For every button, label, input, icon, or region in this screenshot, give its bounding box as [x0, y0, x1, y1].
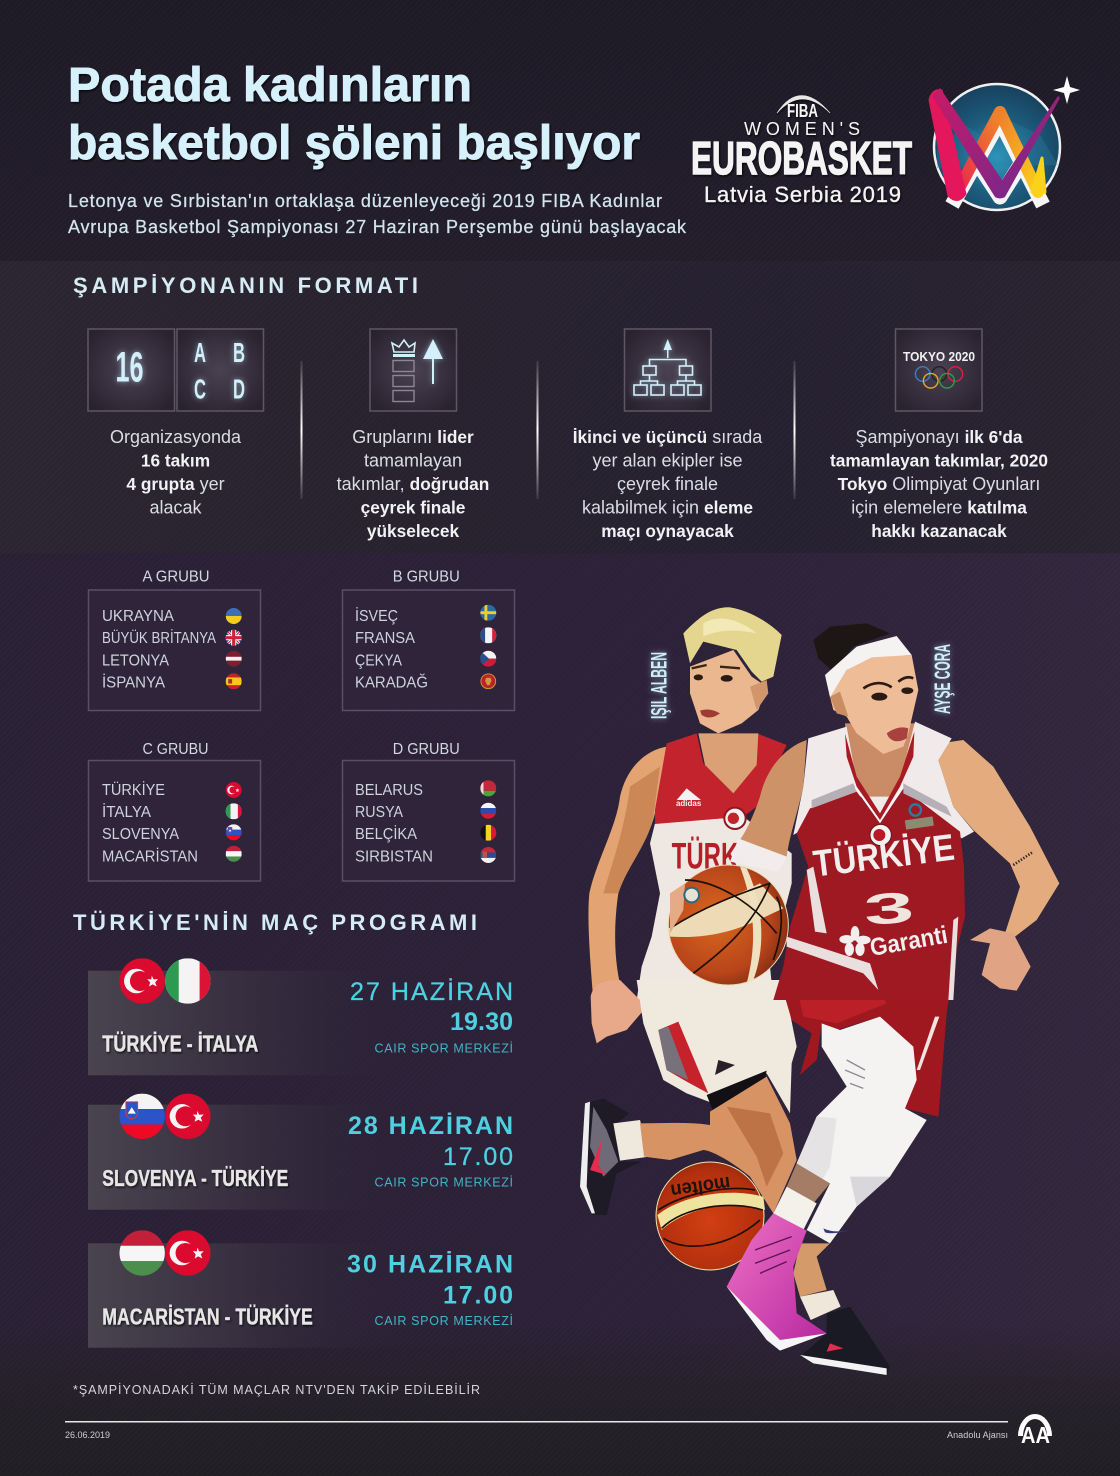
text: leaders: çeyrek finale: [361, 498, 466, 518]
panel: match Slovenya - Türkiye: SLOVENYA - TÜRKİYE: [102, 1165, 288, 1191]
player illustration: [580, 607, 1059, 1375]
logo: championship W emblem: [929, 76, 1080, 210]
text: second and third places: çeyrek finale: [617, 474, 718, 494]
player name: Işıl Alben: IŞIL ALBEN: [646, 652, 672, 719]
title: [68, 59, 640, 170]
panel: Tokyo 2020: [830, 329, 1048, 541]
text: organisation: alacak: [149, 498, 203, 518]
panel: group A: İSPANYA: [102, 672, 165, 691]
text: organisation: 16 takım: [141, 450, 210, 470]
text: second and third places: maçı oynayacak: [601, 521, 734, 541]
panel: group C: TÜRKİYE: [102, 780, 165, 799]
text: organisation: Organizasyonda: [110, 427, 241, 447]
text: leaders: yükselecek: [367, 521, 460, 541]
text: Tokyo qualification: katılma: [967, 498, 1027, 518]
panel: group C: [88, 741, 260, 881]
panel: group A: UKRAYNA: [102, 608, 174, 625]
panel: second and third: [573, 329, 763, 541]
section heading: format: ŞAMPİYONANIN FORMATI: [73, 273, 418, 298]
panel: group D: D GRUBU: [393, 741, 460, 758]
back player upper body: TÜRK: [672, 834, 738, 876]
panel: group C: C GRUBU: [142, 741, 208, 758]
panel: group C: SLOVENYA: [102, 826, 179, 843]
panel: match Slovenya - Türkiye: CAIR SPOR MERKEZİ: [374, 1176, 513, 1190]
panel: group A: BÜYÜK BRİTANYA: [102, 628, 216, 647]
footer credit: Anadolu Ajansı: [947, 1430, 1008, 1440]
panel: group A: A GRUBU: [142, 569, 210, 586]
icon: 16 teams: [88, 329, 174, 411]
panel: group B: B GRUBU: [393, 569, 460, 586]
logo: FIBA Women's EuroBasket: [691, 96, 912, 207]
icon: group letters: A: [194, 337, 206, 368]
panel: match Türkiye - İtalya: TÜRKİYE - İTALYA: [102, 1031, 258, 1057]
panel: group D: [342, 741, 514, 881]
footer rule: [65, 1421, 1008, 1422]
text: second and third places: İkinci ve üçüncü sırada: [573, 427, 762, 447]
panel: match Türkiye - İtalya: CAIR SPOR MERKEZİ: [374, 1041, 513, 1055]
icon: crown and arrow: [370, 329, 456, 411]
panel: group C: İTALYA: [102, 802, 151, 821]
panel: group B: İSVEÇ: [355, 606, 398, 625]
subtitle: [68, 191, 687, 237]
footnote: *ŞAMPİYONADAKİ TÜM MAÇLAR NTV'DEN TAKİP EDİLEBİLİR: [73, 1383, 480, 1397]
front player torso and arms: Garanti: [868, 922, 950, 962]
panel: group C: MACARİSTAN: [102, 847, 198, 866]
icon: Tokyo 2020 rings: TOKYO 2020: [903, 349, 975, 364]
text: Tokyo qualification: hakkı kazanacak: [871, 521, 1007, 541]
icon: 16 teams: 16: [116, 344, 144, 392]
text: leaders: tamamlayan: [364, 450, 462, 470]
panel: 16 teams, 4 groups: [88, 329, 264, 518]
front player torso and arms: 3: [862, 884, 916, 935]
panel: group B: FRANSA: [355, 630, 415, 647]
back player upper body: [588, 607, 792, 1000]
text: leaders: doğrudan: [410, 474, 489, 494]
back player lower body: [580, 980, 797, 1215]
panel: group D: BELÇİKA: [355, 824, 417, 843]
icon: Anadolu Agency logo: AA: [1021, 1422, 1050, 1448]
text: Tokyo qualification: için elemelere: [851, 498, 967, 518]
text: organisation: 4 grupta: [126, 474, 195, 494]
logo: FIBA Women's EuroBasket: Latvia Serbia 2019: [704, 182, 901, 207]
panel: match Türkiye - İtalya: 19.30: [450, 1008, 513, 1036]
panel: match Macaristan - Türkiye: [88, 1230, 513, 1348]
panel: match Macaristan - Türkiye: 30 HAZİRAN: [347, 1250, 513, 1278]
text: leaders: Gruplarını lider: [352, 427, 474, 447]
back player leg: [640, 1077, 797, 1213]
icon: group letters: [177, 329, 264, 411]
back player upper body: adidas: [676, 798, 701, 808]
panel: group B: KARADAĞ: [355, 672, 428, 691]
text: second and third places: yer alan ekipler ise: [592, 450, 743, 470]
held ball: [668, 865, 788, 985]
front player lower body: [727, 980, 952, 1375]
subtitle: Avrupa Basketbol Şampiyonası 27 Haziran Perşembe günü başlayacak: [68, 217, 687, 237]
text: Tokyo qualification: tamamlayan takımlar, 2020: [830, 450, 1048, 470]
panel: group A: [88, 569, 260, 710]
player name: Ayşe Cora: AYŞE CORA: [930, 644, 955, 714]
icon: Tokyo 2020 rings: [896, 329, 982, 411]
icon: group letters: B: [233, 337, 245, 368]
text: second and third places: eleme: [704, 498, 753, 518]
footer date: 26.06.2019: [65, 1430, 110, 1440]
panel: group A: LETONYA: [102, 652, 169, 669]
icon: bracket: [624, 329, 711, 411]
panel: group B: ÇEKYA: [355, 652, 402, 669]
dribbled ball: molten: [669, 1172, 732, 1201]
panel: match Macaristan - Türkiye: MACARİSTAN - TÜRKİYE: [102, 1303, 313, 1329]
logo: FIBA Women's EuroBasket: FIBA: [787, 101, 818, 121]
panel: match Türkiye - İtalya: [88, 958, 513, 1075]
panel: group B: [342, 569, 514, 710]
panel: group D: RUSYA: [355, 804, 403, 821]
logo: FIBA Women's EuroBasket: EUROBASKET: [691, 132, 912, 184]
front player torso and arms: TÜRKİYE: [811, 826, 957, 885]
panel: match Slovenya - Türkiye: 28 HAZİRAN: [348, 1112, 513, 1140]
section heading: match schedule: TÜRKİYE'NİN MAÇ PROGRAMI: [73, 910, 477, 935]
icon: group letters: D: [233, 374, 245, 404]
panel: match Türkiye - İtalya: 27 HAZİRAN: [350, 977, 513, 1006]
panel: group leaders: [337, 329, 489, 541]
text: organisation: yer: [195, 474, 225, 494]
front player torso and arms: [730, 623, 1059, 1000]
text: leaders: takımlar,: [337, 474, 410, 494]
icon: Anadolu Agency logo: [1018, 1414, 1052, 1448]
title: Potada kadınların: [68, 59, 472, 112]
panel: group D: BELARUS: [355, 782, 423, 799]
panel: match Macaristan - Türkiye: CAIR SPOR MERKEZİ: [374, 1314, 513, 1328]
text: second and third places: kalabilmek için: [582, 498, 704, 518]
panel: match Macaristan - Türkiye: 17.00: [443, 1281, 513, 1309]
panel: group D: SIRBISTAN: [355, 849, 433, 866]
icon: group letters: C: [194, 374, 206, 404]
panel: match Slovenya - Türkiye: 17.00: [443, 1143, 513, 1171]
title: basketbol şöleni başlıyor: [68, 117, 640, 170]
panel: match Slovenya - Türkiye: [88, 1094, 513, 1210]
dribbled ball: [656, 1162, 765, 1270]
dividers: [300, 361, 796, 499]
text: Tokyo qualification: Olimpiyat Oyunları: [887, 474, 1040, 494]
logo: FIBA Women's EuroBasket: WOMEN'S: [744, 119, 860, 139]
text: Tokyo qualification: Tokyo: [838, 474, 887, 494]
subtitle: Letonya ve Sırbistan'ın ortaklaşa düzenleyeceği 2019 FIBA Kadınlar: [68, 191, 662, 211]
text: Tokyo qualification: Şampiyonayı ilk 6'da: [856, 427, 1022, 447]
